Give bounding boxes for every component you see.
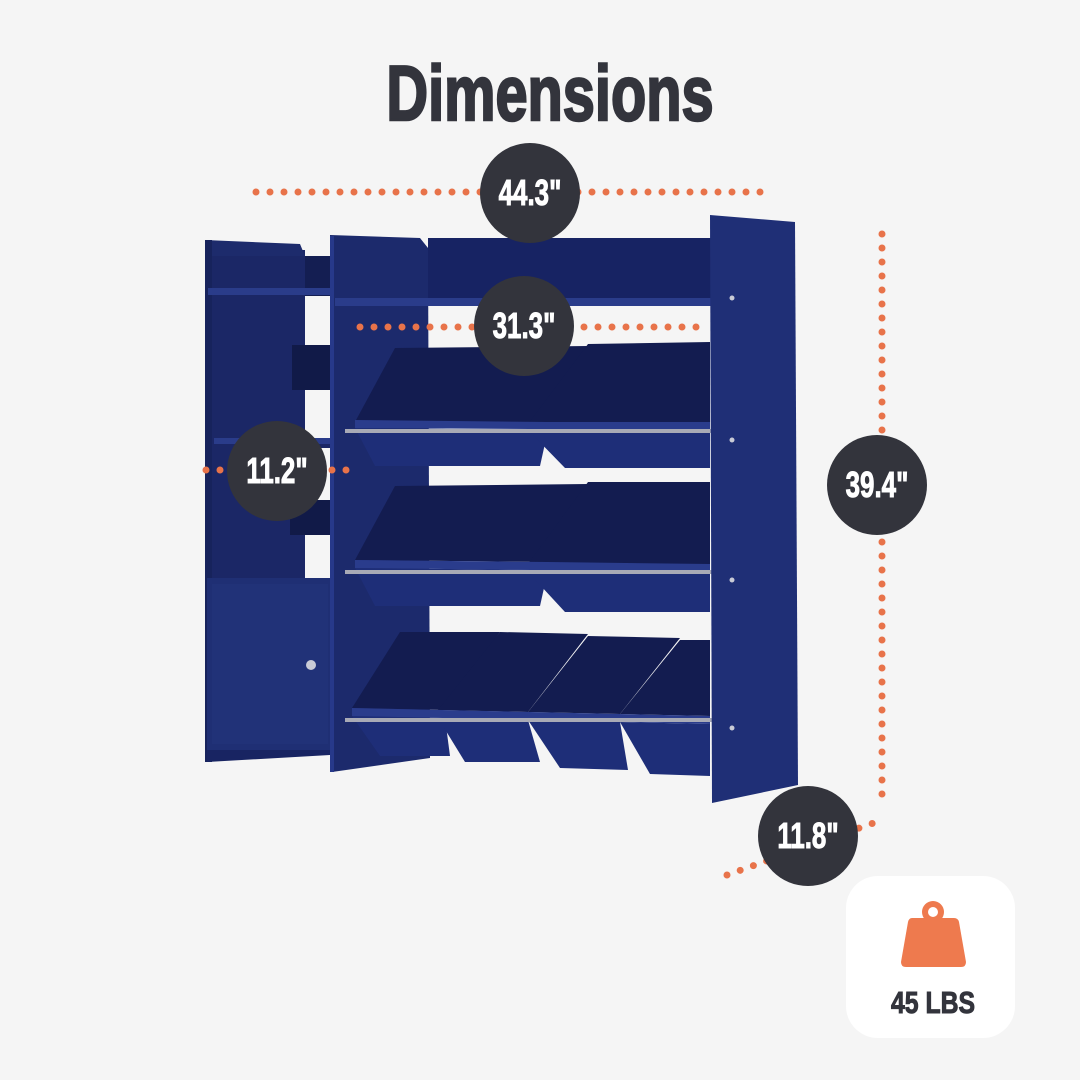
bins row 2 — [345, 482, 712, 612]
badge: 11.8 — [758, 786, 858, 886]
top back panel — [428, 238, 712, 300]
main left side panel — [330, 235, 430, 772]
badge: 44.3: 44.3" — [499, 173, 561, 213]
bins row 3 — [345, 632, 712, 776]
illustration: toy storage shelf — [205, 215, 798, 803]
right side panel — [710, 215, 798, 803]
badge: 31.3: 31.3" — [493, 306, 555, 346]
left unit — [205, 250, 305, 755]
dotted line: left unit depth 11.2 — [206, 466, 360, 474]
badge: 11.2 — [227, 421, 327, 521]
badge: 31.3 — [474, 276, 574, 376]
weight label: 45 LBS — [891, 985, 975, 1020]
bins row 1 — [345, 342, 712, 468]
door — [207, 578, 330, 750]
dotted line: height 39.4 — [878, 234, 886, 796]
badge: 11.2: 11.2" — [246, 451, 308, 491]
dotted line: depth 11.8 — [727, 820, 882, 875]
badge: 39.4 — [827, 435, 927, 535]
title: Dimensions — [386, 50, 714, 137]
badge: 44.3 — [480, 143, 580, 243]
badge: 11.8: 11.8" — [777, 816, 839, 856]
dotted line: width 44.3 — [256, 188, 770, 196]
dotted line: inner width 31.3 — [360, 324, 708, 330]
badge: 39.4: 39.4" — [846, 465, 908, 505]
weight card — [846, 876, 1015, 1038]
icon: weight — [901, 901, 966, 967]
